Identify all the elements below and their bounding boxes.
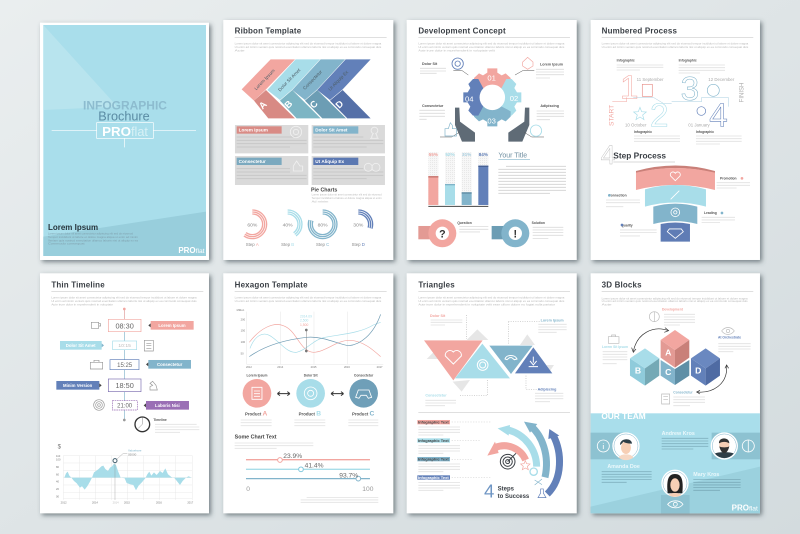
line chart: 2,500 (300, 319, 308, 323)
timeline rows: Minim Version (63, 383, 93, 388)
line chart: 200 (241, 317, 246, 321)
ring labels: 30% (353, 222, 364, 228)
timeline rows: 08:30 (115, 321, 134, 330)
product circles (241, 374, 378, 426)
info boxes: Ut Aliquip Ex (315, 159, 345, 164)
area chart (56, 444, 194, 505)
block callouts: At Orchestrate (718, 335, 741, 339)
slider chart: 41.4% (305, 463, 324, 470)
line chart: 50 (241, 351, 244, 355)
intro text: Aute irure dolor in reprehenderit in voluptate velit esse cillum dolore eu fugiat nulla pariatur (418, 303, 555, 306)
panel: hexagon template (223, 273, 393, 513)
isometric cubes (630, 330, 720, 386)
callouts: Consectetur (422, 104, 444, 108)
cover title (52, 98, 196, 147)
block callouts: Development (662, 308, 684, 312)
member names and bios (602, 431, 741, 490)
intro text: Aute (235, 49, 246, 52)
our team section (591, 411, 760, 513)
ring labels: 60% (247, 222, 258, 228)
funnel labels: Leading (704, 211, 717, 215)
numbered path: 2 (650, 98, 669, 135)
infographic text list: Infographic Text (418, 420, 449, 425)
intro text (235, 297, 382, 303)
bar chart: 52% (445, 152, 456, 157)
product circles: Consectetur (354, 374, 374, 378)
heading: Hexagon Template (235, 281, 308, 290)
product circles: Product C (352, 411, 375, 418)
solution badge: ! (514, 228, 517, 240)
step process heading: Step Process (613, 151, 666, 161)
line chart: 2015 (311, 365, 317, 369)
intro text: Aute irure dolor in reprehenderit in voluptate (51, 303, 114, 306)
intro text: Ut enim ad minim veniam quis nostrud exercitation ullamco laboris nisi ut aliquip ex ea commodo consequat duis (51, 300, 198, 303)
cover footer text: Veniam quis nostrud exercitation ullamco laboris nisi ut aliquip ex ea (48, 239, 139, 242)
cover footer text (48, 223, 139, 246)
area chart: 2017 (187, 501, 194, 505)
line chart: 1,500 (300, 323, 308, 327)
callouts: Lorem Ipsum (540, 62, 564, 66)
footer logo: PROflat (732, 503, 758, 512)
numbered path (609, 59, 745, 144)
intro text (602, 298, 749, 306)
triangle callouts: Dolor Sit (430, 314, 446, 318)
slider chart (235, 434, 378, 502)
line chart: Million (237, 308, 245, 312)
your title text block: Your Title (498, 153, 527, 160)
numbered path: Infographic (679, 59, 697, 63)
callouts: Adipiscing (540, 104, 559, 108)
isometric cubes: A (665, 348, 672, 358)
area chart: 20 (56, 487, 59, 491)
member names and bios: Andrew Kros (662, 431, 695, 437)
intro text (418, 43, 565, 52)
ribbon chevron: A (257, 99, 269, 111)
intro text: Lorem ipsum dolor sit amet consectetur adipiscing elit sed do eiusmod tempor incididunt ut labore et dolore magna (418, 43, 565, 46)
numbered path: 11 September (637, 77, 664, 82)
4 steps to success: Steps (498, 486, 515, 492)
portraits (612, 432, 738, 497)
clock and timeline note: Timeline (153, 418, 167, 422)
curved arrows (487, 422, 560, 494)
infographic text list: Infographic Text (418, 475, 449, 480)
callouts (419, 57, 564, 137)
panel: thin timeline (40, 273, 209, 513)
numbered path: Infographic (634, 130, 652, 134)
bar chart: 31% (462, 152, 472, 157)
team icons (597, 440, 754, 508)
panel: cover page (40, 23, 209, 260)
panel: ribbon template (223, 20, 393, 260)
product circles: Lorem Ipsum (247, 374, 267, 378)
gear ring: 02 (510, 94, 518, 103)
panel: numbered process (591, 20, 760, 260)
infographic text list (417, 420, 492, 490)
panel: 3D blocks (591, 273, 760, 513)
numbered path: 10 October (625, 122, 647, 127)
gear ring: 01 (487, 73, 496, 82)
funnel labels: Connection (608, 194, 627, 198)
line chart: 2016 (344, 365, 350, 369)
cover title: INFOGRAPHIC (83, 98, 167, 112)
slider chart: 23.9% (283, 453, 302, 460)
area chart: 2016 (156, 501, 162, 505)
block callouts: Lorem Sit Ipsum (602, 345, 628, 349)
ribbon chevron: Consectetur (302, 69, 323, 91)
cover footer text: Lorem ipsum dolor sit amet consectetur adipiscing elit sed do eiusmod (48, 233, 134, 236)
ring labels: 40% (283, 222, 293, 228)
area chart: 100 (56, 458, 61, 462)
numbered path: 4 (709, 98, 728, 135)
intro text: Lorem ipsum dolor sit amet consectetur adipiscing elit sed do eiusmod tempor incididunt ut labore et dolore magna (418, 297, 565, 300)
intro text: Lorem ipsum dolor sit amet consectetur adipiscing elit sed do eiusmod tempor incididunt ut labore et dolore magna (235, 297, 382, 300)
intro text: Lorem ipsum dolor sit amet consectetur adipiscing elit sed do eiusmod tempor incididunt ut labore et dolore magna (602, 298, 748, 301)
line chart: 2014.09 (300, 315, 312, 319)
isometric cubes: D (695, 365, 701, 375)
numbered path: START (609, 105, 616, 126)
intro text (235, 43, 382, 52)
area chart: $ (58, 444, 62, 450)
numbered path: 01 January (688, 122, 711, 127)
funnel (636, 165, 715, 242)
area chart: 80 (56, 465, 59, 469)
pie charts heading: Pie Charts (311, 188, 337, 194)
info boxes: Lorem Ipsum (239, 128, 268, 133)
area chart: 40 (56, 480, 59, 484)
triangle callouts: Lorem Ipsum (541, 318, 564, 322)
infographic text list: Infographic Text (418, 438, 449, 443)
numbered path: 1 (620, 70, 639, 107)
area chart: 2015 (124, 501, 130, 505)
triangle callouts: Adipiscing (538, 388, 556, 392)
triangle callouts (425, 314, 567, 406)
intro text: Aute irure dolor in reprehenderit in voluptate velit (418, 49, 496, 52)
pie charts heading: Lorem ipsum dolor sit amet consectetur elit sed do eiusmod (312, 194, 382, 197)
ring labels: Step D (352, 242, 365, 247)
bar chart: 55% (429, 152, 439, 157)
info boxes (235, 125, 385, 185)
heading: 3D Blocks (602, 281, 642, 290)
numbered path: Infographic (617, 59, 635, 63)
timeline rows: Lorem Ipsum (158, 323, 186, 328)
question badge (418, 219, 488, 247)
intro text: Ut enim ad minim veniam quis nostrud exercitation ullamco laboris nisi ut aliquip ex ea commodo consequat duis (235, 300, 382, 303)
ring labels: Step A (246, 242, 259, 247)
target and step icons (500, 453, 546, 498)
heading: Thin Timeline (51, 281, 105, 290)
clock and timeline note (135, 417, 199, 432)
intro text: Lorem ipsum dolor sit amet consectetur adipiscing elit sed do eiusmod tempor incididunt ut labore et dolore magna (602, 43, 749, 46)
ribbon chevron: D (334, 98, 346, 110)
heading: Development Concept (418, 27, 506, 36)
product circles: Product B (299, 411, 321, 418)
numbered path: 12 December (708, 77, 735, 82)
heading: Ribbon Template (235, 27, 302, 36)
step process heading (601, 140, 675, 170)
line chart (237, 308, 383, 369)
ring labels: 80% (318, 222, 328, 228)
slider chart: 0 (246, 486, 250, 493)
line chart: 100 (241, 340, 246, 344)
line chart: 2017 (377, 365, 383, 369)
line chart: 2014 (277, 365, 284, 369)
step process heading: 4 (601, 140, 616, 170)
line chart: 150 (241, 329, 246, 333)
question badge: Question (457, 221, 472, 225)
timeline rows (56, 308, 194, 421)
slider chart: Some Chart Text (235, 434, 277, 440)
cover title: PROflat (102, 124, 148, 139)
panel: development concept (407, 20, 577, 260)
line chart: 2012 (246, 365, 252, 369)
gear ring: 04 (465, 95, 474, 104)
info boxes: Consectetur (239, 159, 266, 164)
intro text (418, 297, 565, 306)
bar chart (428, 152, 489, 206)
intro text: Ut enim ad minim veniam quis nostrud exercitation ullamco laboris nisi ut aliquip ex ea commodo consequat duis (602, 46, 749, 49)
funnel labels: Quality (621, 224, 633, 228)
intro text: Ut enim ad minim veniam quis nostrud exercitation ullamco laboris nisi ut aliquip ex ea commodo consequat duis (418, 300, 565, 303)
gear ring (463, 68, 521, 126)
ring labels: Step C (316, 242, 329, 247)
area chart: 05000 (128, 452, 137, 456)
curved arrows (632, 328, 729, 394)
cover footer text: Commodo consequat (48, 243, 85, 246)
timeline rows: Consectetur (157, 362, 183, 367)
timeline rows: 10:15 (118, 343, 131, 349)
pie charts heading: Ad minim (312, 200, 328, 203)
our team section: OUR TEAM (601, 411, 646, 421)
intro text: Lorem ipsum dolor sit amet consectetur adipiscing elit sed do eiusmod tempor incididunt ut labore et dolore magna (235, 43, 382, 46)
pie charts heading: Tempor incididunt ut labore et dolore magna aliqua ut enim (312, 197, 382, 200)
solution badge: Solution (532, 221, 545, 225)
slider chart: 100 (362, 486, 374, 493)
info boxes: Dolor Sit Amet (315, 128, 348, 133)
question badge: ? (439, 228, 446, 240)
intro text: Ut enim ad minim veniam quis nostrud exercitation ullamco laboris nisi ut aliquip ex ea commodo consequat duis (235, 46, 382, 49)
timeline rows: Dolor Sit Amet (66, 343, 96, 348)
area chart: 2014 (113, 501, 119, 505)
pie charts heading (311, 188, 382, 203)
area chart: 60 (56, 472, 59, 476)
4 steps to success (484, 480, 530, 501)
ribbon chevron: Dolor Sit Amet (277, 67, 302, 92)
4 steps to success: to Success (498, 494, 530, 500)
area chart: 110 (56, 454, 61, 458)
intro text: Ut enim ad minim veniam quis nostrud exercitation ullamco laboris nisi ut aliquip ex ea commodo consequat duis (418, 46, 565, 49)
triangle callouts: Consectetur (425, 394, 447, 398)
solution badge (492, 219, 563, 247)
area chart: 00 (56, 494, 59, 498)
area chart: Valuehare (128, 449, 142, 453)
intro text: Aute (602, 303, 613, 306)
timeline rows: 21:00 (117, 404, 133, 410)
numbered path: FINISH (739, 83, 745, 102)
block callouts: Consectetur (673, 390, 693, 394)
intro text: Lorem ipsum dolor sit amet consectetur adipiscing elit sed do eiusmod tempor incididunt ut labore et dolore magna (51, 297, 198, 300)
timeline axis (123, 309, 125, 420)
product circles: Dolor Sit (304, 374, 318, 378)
intro text (602, 43, 749, 49)
ribbon chevron: B (283, 98, 295, 110)
area chart: 2012 (61, 501, 67, 505)
timeline rows: Laboris Nisi (155, 403, 180, 408)
ribbon chevron: Lorem Ipsum (253, 68, 276, 91)
isometric cubes: B (635, 365, 641, 375)
area chart: 2014 (92, 501, 98, 505)
numbered path: 3 (681, 71, 699, 108)
ring charts (238, 210, 373, 239)
funnel labels: Promotion (720, 176, 737, 180)
timeline rows: 18:50 (115, 381, 134, 390)
intro text (51, 297, 198, 306)
your title text block (498, 153, 566, 193)
cover footer text: Lorem Ipsum (48, 223, 98, 232)
timeline rows: 15:25 (117, 363, 133, 369)
funnel labels (606, 176, 750, 236)
slider chart: 93.7% (339, 472, 358, 479)
ribbon chevron (242, 59, 371, 118)
intro text: Ut enim ad minim veniam quis nostrud exercitation ullamco laboris nisi ut aliquip ex ea commodo consequat duis (602, 300, 749, 303)
panel: triangles (407, 273, 577, 513)
product circles: Product A (245, 411, 268, 418)
ring labels (246, 222, 365, 247)
heading: Triangles (418, 281, 455, 290)
member names and bios: Amanda Doe (607, 464, 640, 470)
ring labels: Step B (281, 242, 294, 247)
block callouts (602, 308, 751, 406)
infographic text list: Infographic Text (418, 457, 449, 462)
isometric cubes: C (665, 367, 672, 377)
gear ring: 03 (487, 116, 496, 125)
triangle group (424, 315, 554, 396)
hands (455, 108, 529, 142)
ribbon chevron: Ut Aliquip Ex (327, 69, 350, 92)
cover logo: PROflat (178, 246, 205, 255)
numbered path: Infographic (696, 130, 714, 134)
ribbon chevron: C (308, 98, 320, 110)
member names and bios: Mary Kros (693, 472, 719, 478)
4 steps to success: 4 (484, 480, 494, 501)
cover footer text: Tempor incididunt ut labore et dolore magna aliqua ut enim ad minim (48, 236, 138, 239)
bar chart: 84% (479, 152, 489, 157)
callouts: Dolor Sit (422, 62, 438, 66)
heading: Numbered Process (602, 27, 677, 36)
cover title: Brochure (98, 110, 150, 124)
